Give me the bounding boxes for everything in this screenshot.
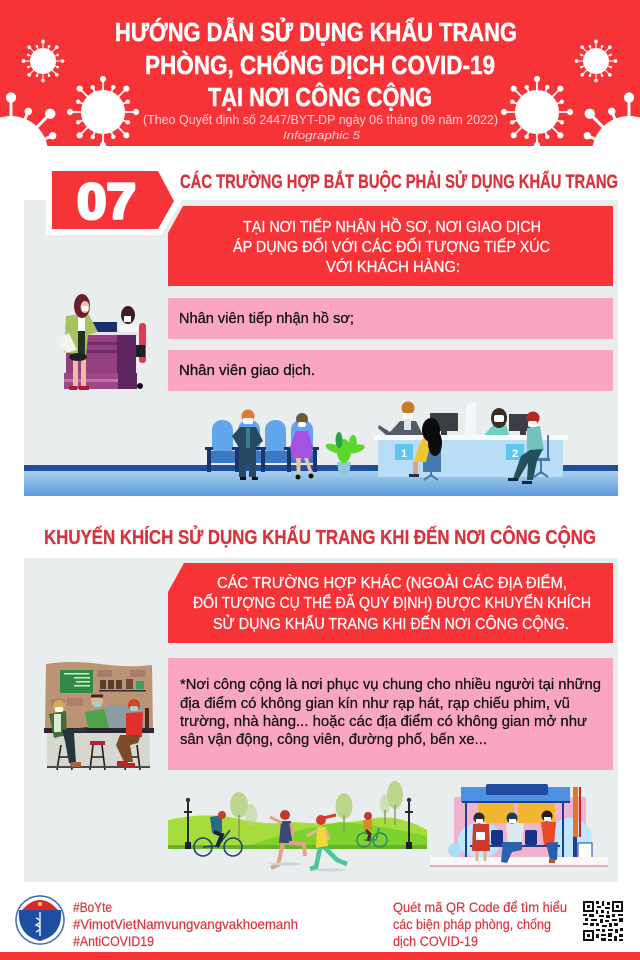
note: public place definition: địa điểm có không gian kín như rạp hát, rạp chiếu phim, vũ	[180, 696, 570, 712]
infographic number: Infographic 5	[283, 130, 361, 142]
counter sign 1: 1	[401, 448, 407, 460]
title: HƯỚNG DẪN SỬ DỤNG KHẨU TRANG	[115, 16, 517, 47]
cyclist 1	[194, 811, 242, 856]
icon: virus medium left	[67, 76, 139, 148]
customer woman	[409, 418, 442, 480]
title	[115, 16, 517, 112]
worker 2	[484, 408, 509, 435]
footer QR instructions: dịch COVID-19	[393, 933, 478, 949]
list item 2: Nhân viên giao dịch.	[179, 363, 315, 379]
footer hashtags: #VimotVietNamvungvangvakhoemanh	[73, 916, 298, 932]
footer QR instructions: các biện pháp phòng, chống	[393, 916, 551, 932]
icon: virus small left	[22, 40, 64, 82]
footer QR instructions: Quét mã QR Code để tìm hiểu	[393, 899, 567, 915]
list item 1	[168, 298, 613, 339]
icon: virus small right	[575, 40, 617, 82]
footer red strip	[0, 952, 640, 960]
subtitle: (Theo Quyết định số 2447/BYT-DP ngày 06 tháng 09 năm 2022)	[143, 113, 498, 127]
title: TẠI NƠI CÔNG CỘNG	[208, 82, 432, 112]
note: public place definition	[168, 658, 613, 770]
illustration: cafe	[44, 662, 154, 770]
person: seated man	[232, 410, 263, 480]
cyclist 2	[357, 812, 387, 847]
footer hashtags: #AntiCOVID19	[73, 933, 154, 949]
icon: virus large right	[568, 92, 640, 214]
callout: other cases	[168, 563, 613, 643]
runner 2	[307, 815, 347, 869]
person: seated woman	[290, 413, 314, 480]
illustration: park	[168, 781, 427, 872]
note: public place definition: *Nơi công cộng là nơi phục vụ chung cho nhiều người tại những	[180, 677, 601, 693]
note: public place definition: sân vận động, công viên, đường phố, bến xe...	[180, 732, 487, 748]
floor	[24, 465, 618, 496]
number badge 07: 07	[77, 174, 136, 230]
footer logo: ministry of health	[16, 896, 64, 944]
illustration: reception desk	[57, 294, 146, 390]
runner 1	[270, 810, 305, 868]
icon: virus medium right	[501, 76, 573, 148]
person: barista	[85, 695, 109, 728]
person: man with backpack	[501, 812, 524, 863]
footer QR instructions	[393, 899, 567, 949]
callout: other cases: ĐỐI TƯỢNG CỤ THỂ ĐÃ QUY ĐỊNH) ĐƯỢC KHUYẾN KHÍCH	[193, 594, 591, 612]
QR code	[583, 901, 623, 941]
title: PHÒNG, CHỐNG DỊCH COVID-19	[145, 50, 495, 80]
callout: reception places	[168, 206, 613, 286]
header banner	[0, 0, 640, 214]
callout: reception places: VỚI KHÁCH HÀNG:	[326, 259, 460, 276]
footer hashtags	[73, 899, 298, 949]
illustration: bus stop	[430, 784, 608, 867]
person: woman on phone	[541, 810, 558, 863]
person: customer left	[49, 700, 88, 767]
person: woman with book	[472, 812, 490, 861]
number badge 07	[46, 165, 182, 235]
customer man	[508, 412, 550, 484]
person: customer right	[116, 699, 143, 768]
illustration: service counter	[374, 401, 568, 484]
note: public place definition: trường, nhà hàng... hoặc các địa điểm có không gian mở như	[180, 714, 587, 730]
callout: reception places: ÁP DỤNG ĐỐI VỚI CÁC ĐỐI TƯỢNG TIẾP XÚC	[233, 238, 550, 256]
counter sign 1	[395, 444, 413, 460]
callout: other cases: CÁC TRƯỜNG HỢP KHÁC (NGOÀI CÁC ĐỊA ĐIỂM,	[217, 574, 567, 592]
list item 1: Nhân viên tiếp nhận hồ sơ;	[179, 311, 354, 327]
counter sign 2	[506, 444, 524, 460]
footer hashtags: #BoYte	[73, 899, 112, 915]
counter sign 2: 2	[512, 448, 518, 460]
panel: mandatory cases	[24, 165, 618, 496]
list item 2	[168, 350, 613, 391]
callout: other cases: SỬ DỤNG KHẨU TRANG KHI ĐẾN NƠI CÔNG CỘNG.	[213, 615, 569, 633]
illustration: waiting chairs	[205, 410, 319, 480]
icon: potted plant	[324, 432, 366, 475]
icon: virus large left	[0, 92, 72, 214]
panel: encouraged cases	[24, 558, 618, 882]
worker 1	[378, 402, 423, 435]
callout: reception places: TẠI NƠI TIẾP NHẬN HỒ SƠ, NƠI GIAO DỊCH	[243, 218, 541, 236]
